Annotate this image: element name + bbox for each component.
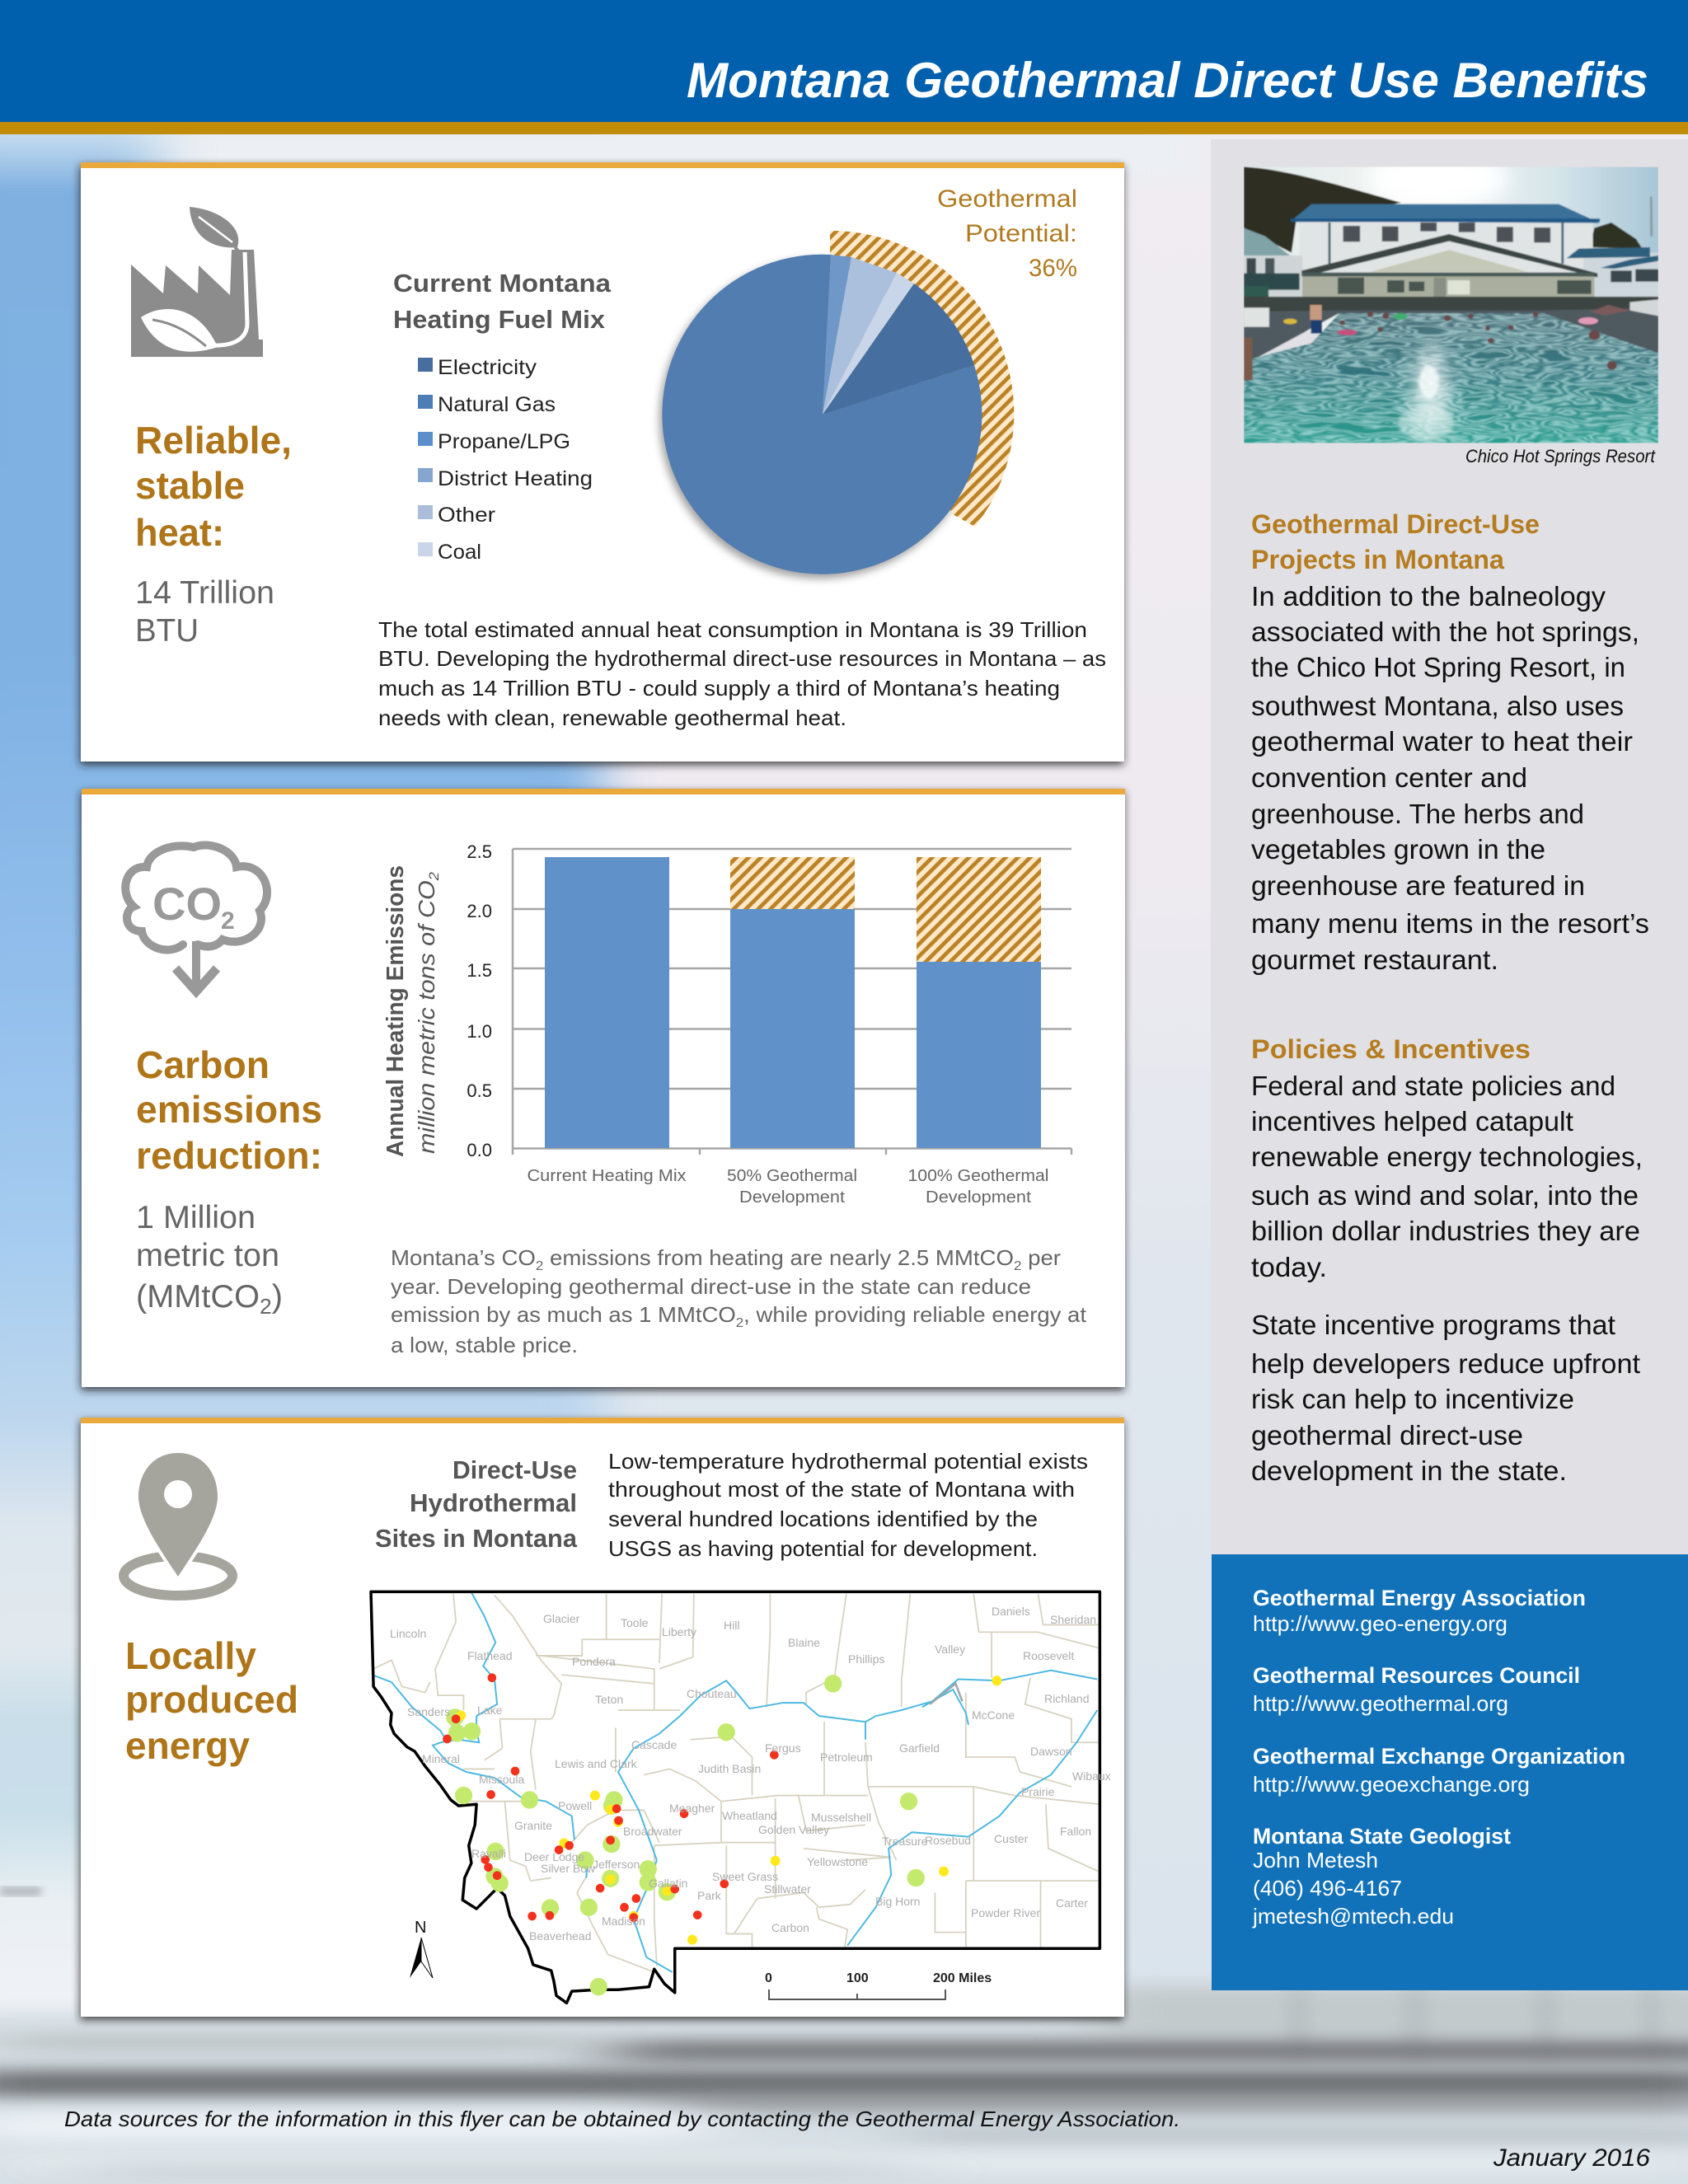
category labels xyxy=(528,1167,1048,1207)
county labels: Fallon xyxy=(1060,1825,1091,1838)
heading: reliable stable heat: Reliable, xyxy=(135,419,292,462)
y axis title: 2 xyxy=(426,871,442,881)
text: chico hot springs: greenhouse are featured in xyxy=(1251,870,1585,901)
text: CO2 emissions: Montana’s CO xyxy=(391,1245,528,1270)
county labels: Custer xyxy=(994,1832,1029,1845)
text: policies: Federal and state policies and xyxy=(1251,1071,1615,1101)
county labels: Hill xyxy=(724,1619,739,1632)
county labels: Deer Lodge xyxy=(524,1850,584,1863)
county labels: Wheatland xyxy=(722,1809,777,1822)
county labels: Toole xyxy=(621,1616,649,1629)
county labels: Carbon xyxy=(771,1921,809,1934)
county labels: Missoula xyxy=(479,1773,524,1786)
county labels: Valley xyxy=(935,1643,965,1656)
chart heading: Current Montana xyxy=(393,269,612,298)
county labels: Wibaux xyxy=(1072,1769,1111,1783)
county labels: Cascade xyxy=(631,1738,677,1751)
county labels: Carter xyxy=(1056,1896,1088,1910)
heading: carbon emissions reduction xyxy=(136,1043,322,1177)
heading: reliable stable heat xyxy=(135,419,292,554)
legend: Other xyxy=(438,504,495,527)
category labels: Current Heating Mix xyxy=(528,1167,686,1185)
stat: 1 million metric ton xyxy=(136,1200,283,1319)
text: CO2 emissions: , while providing reliable energy at xyxy=(743,1302,1087,1327)
stat: 14 trillion BTU xyxy=(135,575,274,649)
map heading: Direct-Use xyxy=(452,1455,577,1484)
map heading: Sites in Montana xyxy=(375,1524,578,1553)
county labels: Richland xyxy=(1044,1692,1089,1705)
header banner xyxy=(0,0,1688,134)
county labels: Lincoln xyxy=(390,1627,426,1640)
stat: 14 trillion BTU: BTU xyxy=(135,613,199,649)
callout: geothermal potential: Geothermal xyxy=(937,185,1077,213)
y axis tick labels: 1.0 xyxy=(467,1021,492,1042)
map heading xyxy=(375,1455,578,1553)
contact: montana state geologist: jmetesh@mtech.edu xyxy=(1252,1904,1454,1929)
heading: geothermal direct-use projects: Projects in Montana xyxy=(1251,545,1504,574)
county labels: Petroleum xyxy=(820,1750,873,1764)
text: chico hot springs: greenhouse. The herbs and xyxy=(1251,799,1584,829)
county labels: Chouteau xyxy=(687,1687,737,1700)
heading: carbon emissions reduction: emissions xyxy=(136,1088,322,1131)
stat: 14 trillion BTU: 14 Trillion xyxy=(135,575,274,611)
callout: geothermal potential xyxy=(937,185,1077,282)
stat: 1 million metric ton: 1 Million xyxy=(136,1200,256,1235)
category labels: Development xyxy=(739,1188,845,1207)
contact: geothermal energy association xyxy=(1253,1586,1586,1636)
heading: geothermal direct-use projects xyxy=(1251,509,1540,574)
text: hydrothermal potential: throughout most of the state of Montana with xyxy=(608,1477,1075,1502)
county labels: Jefferson xyxy=(593,1858,640,1871)
stat: 1 million metric ton: ) xyxy=(272,1279,283,1315)
contact: montana state geologist xyxy=(1252,1824,1511,1929)
county labels: Roosevelt xyxy=(1023,1649,1074,1662)
text: CO2 emissions: 2 xyxy=(536,1259,543,1273)
county labels: Prairie xyxy=(1021,1785,1055,1798)
legend: District Heating xyxy=(438,467,593,490)
legend: Electricity xyxy=(438,356,537,379)
county labels: Park xyxy=(697,1889,722,1902)
y axis tick labels: 1.5 xyxy=(467,960,492,981)
county labels: Teton xyxy=(595,1693,623,1706)
county labels: Blaine xyxy=(788,1636,820,1649)
text: chico hot springs: gourmet restaurant. xyxy=(1251,944,1498,975)
panel: reliable stable heat xyxy=(81,162,1124,762)
north arrow xyxy=(410,1919,433,1978)
county labels: Beaverhead xyxy=(529,1929,592,1943)
icon: factory with leaves xyxy=(131,207,263,357)
text: CO2 emissions: emission by as much as 1 MMtCO xyxy=(391,1302,717,1327)
heading: reliable stable heat: stable xyxy=(135,464,245,507)
category labels: Development xyxy=(926,1188,1031,1207)
county labels: Yellowstone xyxy=(807,1855,868,1868)
text: chico hot springs: many menu items in the resort’s xyxy=(1251,908,1649,939)
y axis tick labels xyxy=(467,841,492,1160)
contact: geothermal exchange organization: http://www.geoexchange.org xyxy=(1253,1772,1530,1797)
text: heat consumption: needs with clean, renewable geothermal heat. xyxy=(378,705,846,730)
heading: geothermal direct-use projects: Geothermal Direct-Use xyxy=(1251,509,1540,539)
state border xyxy=(371,1591,1100,2003)
y axis tick labels: 2.0 xyxy=(467,901,492,921)
text: policies: such as wind and solar, into the xyxy=(1251,1180,1639,1211)
county labels: Sweet Grass xyxy=(712,1870,778,1883)
map: Montana hydrothermal sites xyxy=(371,1591,1111,2003)
chart heading xyxy=(393,269,612,334)
county labels: Meagher xyxy=(669,1802,715,1815)
county labels: Judith Basin xyxy=(698,1762,761,1775)
text: policies: help developers reduce upfront xyxy=(1251,1348,1640,1379)
text: chico hot springs: associated with the hot springs, xyxy=(1251,616,1639,647)
text: policies: today. xyxy=(1251,1252,1327,1282)
text: CO2 emissions: year. Developing geothermal direct-use in the state can reduce xyxy=(391,1274,1031,1299)
legend: Coal xyxy=(438,541,481,564)
text: CO2 emissions: 2 xyxy=(736,1316,743,1330)
text: heat consumption xyxy=(378,617,1106,730)
text: policies: geothermal direct-use xyxy=(1251,1420,1523,1451)
title: Montana Geothermal Direct Use Benefits xyxy=(687,53,1648,108)
rivers xyxy=(373,1592,1097,1972)
text: hydrothermal potential xyxy=(608,1449,1088,1561)
y axis title xyxy=(382,865,442,1157)
contact: geothermal exchange organization xyxy=(1253,1744,1625,1797)
legend xyxy=(418,356,593,564)
county labels: Sheridan xyxy=(1050,1613,1096,1626)
county labels: Glacier xyxy=(543,1612,580,1625)
county lines xyxy=(373,1594,1100,1972)
heading: carbon emissions reduction: Carbon xyxy=(136,1043,270,1086)
county labels: Treasure xyxy=(882,1835,928,1848)
y axis title: million metric tons of CO xyxy=(414,902,439,1154)
contact: montana state geologist: Montana State Geologist xyxy=(1253,1824,1511,1849)
county labels: Daniels xyxy=(992,1605,1030,1618)
panel: carbon emissions reduction xyxy=(82,789,1125,1387)
text: CO2 emissions: emissions from heating are nearly 2.5 MMtCO xyxy=(543,1245,1014,1270)
scale bar xyxy=(765,1971,992,1999)
footer: date: January 2016 xyxy=(1493,2144,1650,2172)
text: policies: renewable energy technologies, xyxy=(1251,1141,1643,1172)
contact: geothermal energy association: http://www.geo-energy.org xyxy=(1253,1611,1507,1636)
photo: Chico Hot Springs Resort pool xyxy=(1244,148,1658,443)
county labels: Silver Bow xyxy=(541,1862,596,1875)
text: chico hot springs: In addition to the balneology xyxy=(1251,581,1606,612)
category labels: 50% Geothermal xyxy=(727,1167,857,1185)
text: hydrothermal potential: several hundred locations identified by the xyxy=(608,1507,1038,1531)
text: chico hot springs: geothermal water to heat their xyxy=(1251,726,1633,757)
contact: geothermal resources council: http://www.geothermal.org xyxy=(1253,1691,1508,1716)
county labels: Golden Valley xyxy=(758,1823,829,1836)
county labels: Powell xyxy=(558,1799,592,1812)
geothermal potential hatched arc xyxy=(830,231,1014,527)
text: policies: billion dollar industries they are xyxy=(1251,1216,1640,1246)
y axis tick labels: 2.5 xyxy=(467,841,492,862)
county labels: Sanders xyxy=(407,1705,450,1718)
contact: geothermal energy association: Geothermal Energy Association xyxy=(1253,1586,1586,1610)
county labels: Mineral xyxy=(422,1752,460,1765)
legend: Natural Gas xyxy=(438,393,556,416)
text: hydrothermal potential: USGS as having potential for development. xyxy=(608,1536,1038,1561)
county labels: Ravalli xyxy=(471,1847,506,1860)
contact: montana state geologist: (406) 496-4167 xyxy=(1253,1876,1402,1900)
callout: geothermal potential: 36% xyxy=(1029,255,1077,282)
bar chart: annual heating emissions xyxy=(382,841,1071,1207)
contact: geothermal resources council: Geothermal Resources Council xyxy=(1253,1663,1580,1688)
pie chart: heating fuel mix xyxy=(659,231,1014,579)
y axis title: Annual Heating Emissions xyxy=(382,865,409,1157)
legend: Propane/LPG xyxy=(438,430,570,453)
stat: 1 million metric ton: 2 xyxy=(260,1294,272,1319)
scale bar: 200 Miles xyxy=(933,1971,992,1985)
text: chico hot springs: southwest Montana, also uses xyxy=(1251,691,1624,721)
contact: montana state geologist: John Metesh xyxy=(1253,1848,1378,1872)
text: CO2 emissions: 2 xyxy=(1014,1259,1022,1273)
county labels: Dawson xyxy=(1030,1745,1072,1758)
county labels: Powder River xyxy=(971,1906,1040,1919)
bar: 100% geothermal xyxy=(917,857,1041,1148)
text: CO2 emissions: a low, stable price. xyxy=(391,1333,578,1357)
county labels: Big Horn xyxy=(875,1895,920,1908)
icon: CO2 cloud with down arrow: CO xyxy=(152,878,222,930)
text: policies: development in the state. xyxy=(1251,1455,1567,1486)
text: policies: State incentive programs that xyxy=(1251,1310,1615,1340)
heading: reliable stable heat: heat: xyxy=(135,511,224,554)
photo caption: Chico Hot Springs Resort xyxy=(1465,446,1656,466)
county labels: Fergus xyxy=(765,1741,801,1755)
county labels: Garfield xyxy=(899,1741,940,1755)
contact: geothermal exchange organization: Geothermal Exchange Organization xyxy=(1253,1744,1625,1769)
text: chico hot springs: vegetables grown in the xyxy=(1251,834,1545,865)
bar: 50% geothermal xyxy=(730,857,855,1148)
heading: policies and incentives: Policies & Incentives xyxy=(1251,1034,1531,1064)
county labels: Phillips xyxy=(848,1652,884,1666)
county labels: Broadwater xyxy=(623,1825,682,1838)
category labels: 100% Geothermal xyxy=(908,1167,1048,1185)
icon: map pin xyxy=(124,1453,232,1596)
text: CO2 emissions xyxy=(391,1245,1087,1357)
bar: current heating mix xyxy=(545,857,669,1148)
heading: carbon emissions reduction: reduction: xyxy=(136,1134,322,1177)
footer: data sources note: Data sources for the information in this flyer can be obtained by contacting the Geothermal Energy Association. xyxy=(64,2107,1180,2131)
county labels: Liberty xyxy=(662,1625,696,1638)
county labels: Pondera xyxy=(572,1655,616,1668)
text: heat consumption: The total estimated annual heat consumption in Montana is 39 Trillion xyxy=(378,617,1087,642)
north arrow: N xyxy=(415,1919,426,1937)
scale bar: 100 xyxy=(846,1971,869,1985)
text: hydrothermal potential: Low-temperature hydrothermal potential exists xyxy=(608,1449,1088,1474)
text: heat consumption: BTU. Developing the hydrothermal direct-use resources in Montana – as xyxy=(378,646,1106,671)
county labels: Granite xyxy=(514,1819,552,1832)
county labels: Madison xyxy=(602,1915,645,1928)
text: chico hot springs: convention center and xyxy=(1251,762,1527,793)
text: policies xyxy=(1251,1071,1643,1486)
text: policies: incentives helped catapult xyxy=(1251,1106,1573,1137)
text: CO2 emissions: per xyxy=(1021,1245,1061,1270)
panel: locally produced energy xyxy=(81,1418,1124,2017)
heading: locally produced energy: energy xyxy=(125,1724,250,1767)
text: heat consumption: much as 14 Trillion BTU - could supply a third of Montana’s heating xyxy=(378,676,1060,701)
heading: locally produced energy xyxy=(125,1634,298,1767)
county labels: McCone xyxy=(972,1708,1015,1722)
y axis tick labels: 0.5 xyxy=(467,1080,492,1101)
county labels: Musselshell xyxy=(811,1811,871,1824)
scale bar: 0 xyxy=(765,1971,772,1985)
heading: locally produced energy: produced xyxy=(125,1678,298,1721)
county labels: Lewis and Clark xyxy=(555,1757,638,1770)
heading: locally produced energy: Locally xyxy=(125,1634,256,1677)
panel: contacts xyxy=(1212,1554,1688,1990)
panel: right sidebar xyxy=(1211,139,1688,1554)
icon: CO2 cloud with down arrow: 2 xyxy=(221,907,235,935)
text: policies: risk can help to incentivize xyxy=(1251,1384,1574,1414)
county labels: Stillwater xyxy=(764,1882,811,1896)
stat: 1 million metric ton: metric ton xyxy=(136,1238,279,1273)
county labels: Rosebud xyxy=(925,1834,971,1847)
text: chico hot springs: the Chico Hot Spring Resort, in xyxy=(1251,652,1625,682)
callout: geothermal potential: Potential: xyxy=(965,220,1077,247)
county labels: Flathead xyxy=(467,1649,512,1662)
y axis tick labels: 0.0 xyxy=(467,1140,492,1160)
county labels xyxy=(390,1605,1111,1943)
chart heading: Heating Fuel Mix xyxy=(393,305,606,334)
contact: geothermal resources council xyxy=(1253,1663,1580,1716)
county labels: Lake xyxy=(477,1704,503,1717)
site markers xyxy=(443,1673,1001,1995)
icon: CO2 cloud with down arrow xyxy=(125,845,267,991)
text: chico hot springs xyxy=(1251,581,1649,975)
stat: 1 million metric ton: (MMtCO xyxy=(136,1279,257,1315)
map heading: Hydrothermal xyxy=(410,1488,577,1517)
county labels: Gallatin xyxy=(649,1877,687,1890)
